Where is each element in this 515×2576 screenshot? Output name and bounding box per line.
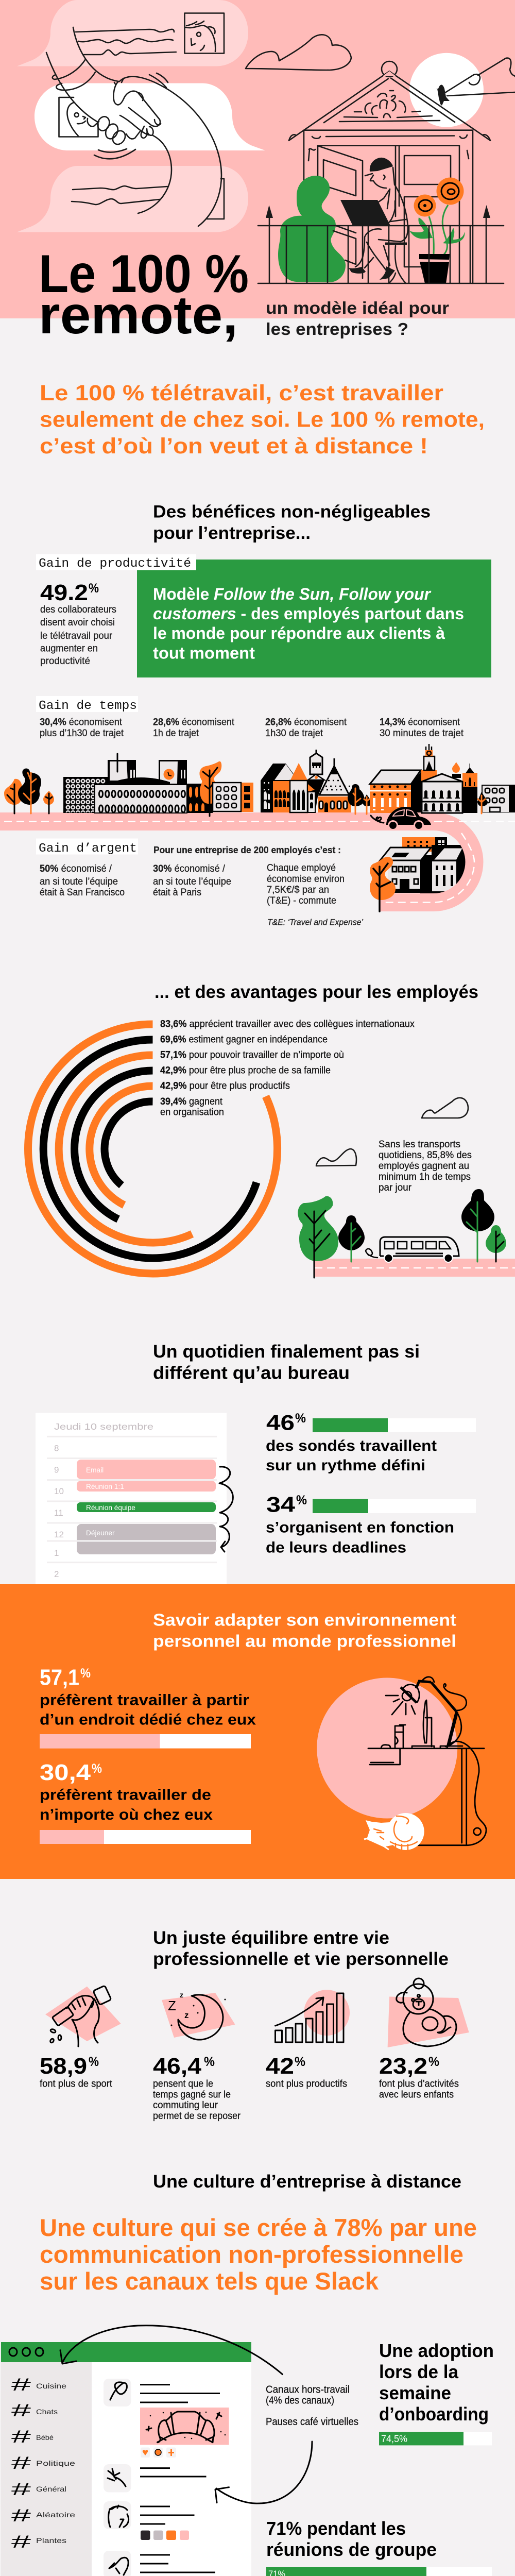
stat: 57,1% dedicated place: 57,1 <box>40 1665 79 1690</box>
green callout: follow the sun: customers - des employés partout dans <box>153 604 464 623</box>
illustration: car <box>371 807 431 831</box>
commute text: Sans les transports <box>379 1139 460 1150</box>
stat: 23,2% kids <box>379 2054 459 2100</box>
stat: 49.2% productivity <box>40 580 116 667</box>
stat: 46,4% rest <box>153 2054 241 2122</box>
time savings stats: 26,8% économisent <box>265 717 347 727</box>
stat: 30,4% anywhere at home: 30,4 <box>40 1760 91 1785</box>
stat: 49.2% productivity: productivité <box>40 656 90 667</box>
stat: onboarding adoption: Une adoption <box>379 2340 494 2361</box>
calendar events: Réunion 1:1 <box>86 1483 124 1490</box>
stat: 30,4% anywhere at home: % <box>92 1761 102 1776</box>
title: remote, <box>39 285 238 345</box>
heading: work-life balance <box>153 1928 449 1969</box>
illustration: sun <box>409 53 484 127</box>
message avatars <box>104 2379 131 2576</box>
stat: 49.2% productivity: le télétravail pour <box>40 631 113 641</box>
stat: 46% defined rhythm <box>266 1411 476 1474</box>
icon: moon and zzz <box>162 1991 235 2040</box>
channel list <box>11 2375 75 2552</box>
stat: 57,1% dedicated place: préfèrent travailler à partir <box>40 1692 249 1708</box>
stat: 49.2% productivity: % <box>89 581 99 596</box>
money savings stats: Pour une entreprise de 200 employés c’est : <box>153 844 341 855</box>
money savings stats: économise environ <box>267 874 345 885</box>
calendar events: Email <box>86 1466 104 1474</box>
money savings stats: était à San Francisco <box>40 887 125 898</box>
stat: 34% deadlines: de leurs deadlines <box>266 1539 406 1556</box>
icon: moon and zzz: z <box>180 1991 183 1999</box>
stat: 57,1% dedicated place <box>40 1665 256 1749</box>
orange statement: culture: communication non-professionnelle <box>40 2241 464 2268</box>
money savings stats: (T&E) - commute <box>267 895 336 906</box>
radial chart labels <box>160 1019 415 1118</box>
intro orange statement: seulement de chez soi. Le 100 % remote, <box>40 407 485 432</box>
time savings stats <box>40 717 464 739</box>
heading: work-life balance: professionnelle et vie personnelle <box>153 1949 449 1969</box>
message lines <box>140 2385 220 2572</box>
calendar events <box>77 1460 216 1554</box>
stat: group meetings <box>266 2518 492 2576</box>
stat: 46,4% rest: % <box>204 2055 215 2069</box>
channel list: Cuisine <box>36 2382 66 2390</box>
channel list: Chats <box>36 2408 58 2416</box>
radial bar chart <box>28 1024 278 1274</box>
stat: 46,4% rest: commuting leur <box>153 2100 218 2111</box>
illustration: chat bubbles and handshake <box>17 0 265 232</box>
stat: 23,2% kids: % <box>428 2055 439 2069</box>
image: croissant <box>140 2408 229 2445</box>
calendar events: Déjeuner <box>86 1529 115 1537</box>
time savings stats: 14,3% économisent <box>380 717 460 727</box>
radial chart labels: 42,9% pour être plus productifs <box>160 1081 290 1091</box>
stat: 58,9% sport: 58,9 <box>40 2054 87 2079</box>
stat: 42% productive <box>266 2054 347 2090</box>
radial chart labels: en organisation <box>160 1107 224 1118</box>
illustration: tree by the road bend <box>370 857 396 911</box>
intro orange statement <box>40 381 485 459</box>
illustration: lower buildings <box>380 837 467 894</box>
road <box>0 821 515 903</box>
heading: adapting environment: Savoir adapter son environnement <box>153 1611 456 1630</box>
stat: onboarding adoption <box>379 2340 494 2445</box>
intro orange statement: c’est d’où l’on veut et à distance ! <box>40 434 428 459</box>
green callout: follow the sun <box>137 560 491 677</box>
green callout: follow the sun: le monde pour répondre aux clients à <box>153 624 445 642</box>
time savings stats: plus d’1h30 de trajet <box>40 728 124 739</box>
illustration: clouds <box>316 1098 468 1166</box>
annotation: non-work channels: Canaux hors-travail <box>266 2384 350 2396</box>
channel list: # <box>11 2401 31 2420</box>
arrow: to messages <box>215 2442 312 2503</box>
time savings stats: 30 minutes de trajet <box>380 728 464 739</box>
commute text: employés gagnent au <box>379 1161 469 1172</box>
illustration: bus on road <box>298 1189 515 1278</box>
heading: daily routine <box>153 1342 420 1383</box>
icon: growth bars <box>275 1990 350 2042</box>
stat: 46,4% rest: 46,4 <box>153 2054 202 2079</box>
stat: 58,9% sport <box>40 2054 113 2090</box>
heading: adapting environment: personnel au monde professionnel <box>153 1631 456 1651</box>
illustration: skyline left <box>4 754 253 816</box>
money savings stats: 50% économisé / <box>40 863 112 874</box>
green callout: follow the sun: tout moment <box>153 644 255 663</box>
illustration: cloud <box>246 35 351 70</box>
stat: 30,4% anywhere at home: préfèrent travailler de <box>40 1787 211 1804</box>
time savings stats: 1h de trajet <box>153 728 199 739</box>
stat: 34% deadlines: % <box>296 1493 307 1507</box>
annotation: non-work channels: (4% des canaux) <box>266 2395 334 2406</box>
stat: 46% defined rhythm: sur un rythme défini <box>266 1457 425 1474</box>
money savings stats: était à Paris <box>153 887 201 898</box>
commute text: quotidiens, 85,8% des <box>379 1150 472 1161</box>
channel list: Plantes <box>36 2536 66 2545</box>
title <box>39 244 249 345</box>
radial chart labels: 39,4% gagnent <box>160 1096 223 1107</box>
stat: 42% productive: % <box>295 2055 305 2069</box>
illustration: skyline centre <box>261 750 372 814</box>
money savings stats: 7,5K€/$ par an <box>267 885 329 895</box>
calendar panel: 12 <box>54 1530 64 1539</box>
arrow: calendar squiggle <box>219 1467 233 1552</box>
stat: onboarding adoption: semaine <box>379 2382 451 2403</box>
stat: 49.2% productivity: 49.2 <box>40 580 88 605</box>
colour swatches <box>141 2531 189 2540</box>
orange statement: culture <box>40 2214 477 2295</box>
commute text: par jour <box>379 1182 412 1193</box>
stat: 23,2% kids: avec leurs enfants <box>379 2090 454 2100</box>
channel list: Aléatoire <box>36 2511 75 2519</box>
stat: 49.2% productivity: disent avoir choisi <box>40 617 115 628</box>
heading: adapting environment <box>153 1611 456 1651</box>
stat: 30,4% anywhere at home <box>40 1760 251 1844</box>
icon: moon and zzz: z <box>184 2010 188 2020</box>
calendar panel: 8 <box>54 1444 59 1453</box>
heading: daily routine: différent qu’au bureau <box>153 1363 350 1383</box>
stat: 46,4% rest: pensent que le <box>153 2078 213 2090</box>
stat: 46,4% rest: permet de se reposer <box>153 2111 241 2122</box>
orange statement: culture: Une culture qui se crée à 78% par une <box>40 2214 477 2241</box>
money savings stats <box>40 844 363 927</box>
channel list: # <box>11 2532 31 2552</box>
tag: gain de temps: Gain de temps <box>39 699 137 713</box>
radial chart labels: 83,6% apprécient travailler avec des collègues internationaux <box>160 1019 415 1029</box>
stat: onboarding adoption: lors de la <box>379 2361 459 2382</box>
channel list: # <box>11 2506 31 2526</box>
title: Le 100 % <box>39 244 249 304</box>
channel list: # <box>11 2427 31 2447</box>
calendar panel: 2 <box>54 1569 59 1579</box>
channel list: # <box>11 2453 31 2473</box>
illustration: skyline right <box>370 744 515 814</box>
annotation: non-work channels <box>266 2384 358 2428</box>
calendar panel: 11 <box>54 1508 63 1518</box>
money savings stats: an si toute l’équipe <box>40 876 118 887</box>
stat: 34% deadlines: 34 <box>266 1492 296 1517</box>
stat: 42% productive: sont plus productifs <box>266 2078 347 2090</box>
money savings stats: 30% économisé / <box>153 863 226 874</box>
calendar panel: Jeudi 10 septembre <box>54 1421 153 1432</box>
icon: fist with bottle <box>45 1986 121 2046</box>
money savings stats: T&E: ‘Travel and Expense’ <box>267 917 363 927</box>
hero panel <box>0 0 515 345</box>
stat: 34% deadlines: s’organisent en fonction <box>266 1519 454 1536</box>
stat: 46% defined rhythm: % <box>295 1411 306 1426</box>
stat: group meetings: réunions de groupe <box>266 2539 437 2560</box>
time savings stats: 1h30 de trajet <box>265 728 323 739</box>
calendar panel: 10 <box>54 1486 64 1496</box>
heading: work-life balance: Un juste équilibre entre vie <box>153 1928 389 1948</box>
money savings stats: an si toute l’équipe <box>153 876 231 887</box>
stat: 46,4% rest: temps gagné sur le <box>153 2090 231 2100</box>
calendar panel: 1 <box>54 1548 59 1558</box>
orange statement: culture: sur les canaux tels que Slack <box>40 2267 379 2295</box>
heading: company benefits: pour l’entreprise... <box>153 523 311 543</box>
calendar events: Réunion équipe <box>86 1504 135 1512</box>
calendar panel: 9 <box>54 1465 59 1475</box>
annotation: non-work channels: Pauses café virtuelles <box>266 2416 358 2428</box>
arrow: to channels <box>60 2326 282 2374</box>
channel list: # <box>11 2375 31 2395</box>
calendar panel <box>36 1413 227 1584</box>
subtitle: les entreprises ? <box>266 319 408 338</box>
channel list: Bébé <box>36 2433 54 2442</box>
slack window panel <box>1 2342 251 2576</box>
stat: 49.2% productivity: des collaborateurs <box>40 604 116 615</box>
tag: gain d'argent: Gain d’argent <box>39 842 137 856</box>
stat: 23,2% kids: 23,2 <box>379 2054 427 2079</box>
stat: onboarding adoption: d’onboarding <box>379 2403 489 2425</box>
subtitle: un modèle idéal pour <box>266 298 449 317</box>
illustration: bird on wire <box>436 58 515 106</box>
channel list: # <box>11 2480 31 2499</box>
stat: 30,4% anywhere at home: n’importe où chez eux <box>40 1806 213 1823</box>
stat: onboarding adoption: 74,5% <box>381 2434 407 2445</box>
heading: company benefits <box>153 502 431 543</box>
commute text <box>379 1139 472 1193</box>
money savings stats: Chaque employé <box>267 862 336 874</box>
heading: remote culture: Une culture d’entreprise à distance <box>153 2172 461 2192</box>
channel list: Général <box>36 2485 66 2493</box>
stat: 23,2% kids: font plus d'activités <box>379 2078 459 2090</box>
icon: moon and zzz: Z <box>168 1998 176 2013</box>
stat: 34% deadlines <box>266 1492 476 1556</box>
stat: group meetings: 71% pendant les <box>266 2518 406 2539</box>
stat: 58,9% sport: % <box>89 2055 99 2069</box>
subtitle <box>266 298 449 338</box>
stat: 42% productive: 42 <box>266 2054 294 2079</box>
radial chart labels: 69,6% estiment gagner en indépendance <box>160 1035 328 1045</box>
emoji reactions <box>141 2447 176 2458</box>
radial chart labels: 57,1% pour pouvoir travailler de n’importe où <box>160 1050 344 1060</box>
channel list: Politique <box>36 2459 75 2467</box>
radial chart labels: 42,9% pour être plus proche de sa famille <box>160 1065 331 1076</box>
stat: 46% defined rhythm: des sondés travaillent <box>266 1437 437 1454</box>
illustration: house with remote worker <box>258 61 504 283</box>
heading: employee advantages: ... et des avantages pour les employés <box>154 982 478 1002</box>
intro orange statement: Le 100 % télétravail, c’est travailler <box>40 381 443 405</box>
green callout: follow the sun: Modèle Follow the Sun, Follow your <box>153 585 432 603</box>
orange panel <box>0 1584 515 1879</box>
stat: 49.2% productivity: augmenter en <box>40 643 98 654</box>
commute text: minimum 1h de temps <box>379 1172 471 1182</box>
stat: 57,1% dedicated place: d’un endroit dédié chez eux <box>40 1711 256 1728</box>
illustration: desk, lamp and cat <box>317 1677 486 1850</box>
heading: company benefits: Des bénéfices non-négligeables <box>153 502 431 521</box>
time savings stats: 28,6% économisent <box>153 717 235 727</box>
stat: 58,9% sport: font plus de sport <box>40 2078 113 2090</box>
stat: 46% defined rhythm: 46 <box>266 1411 295 1434</box>
tag: gain de productivité: Gain de productivité <box>39 557 191 571</box>
stat: 57,1% dedicated place: % <box>80 1666 91 1681</box>
time savings stats: 30,4% économisent <box>40 717 123 727</box>
heading: daily routine: Un quotidien finalement pas si <box>153 1342 420 1362</box>
icon: teddy bear <box>388 1978 469 2047</box>
